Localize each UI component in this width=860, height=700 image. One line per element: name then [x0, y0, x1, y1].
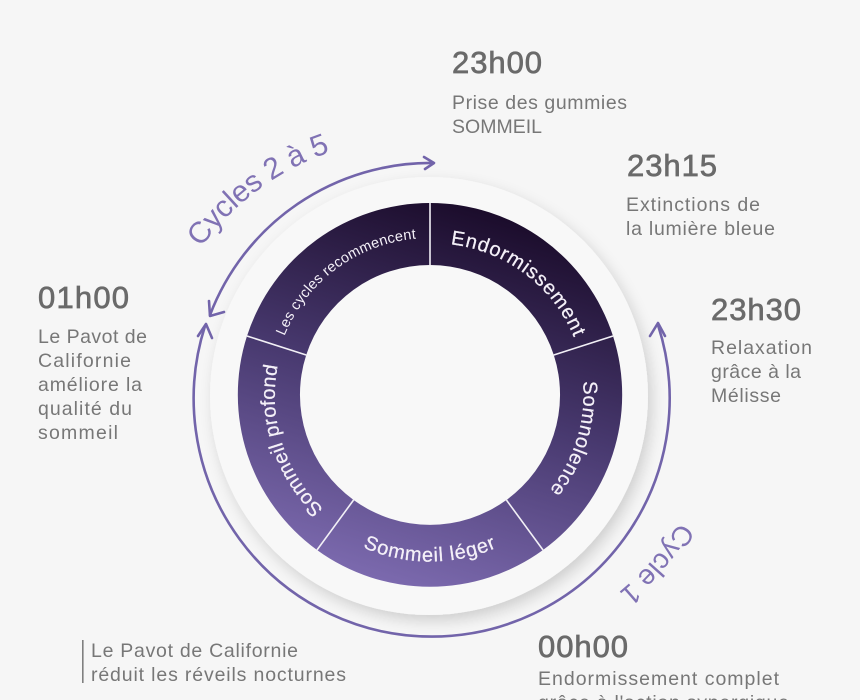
- step: 23h00: [452, 45, 627, 138]
- step: 23h00: 23h00: [452, 45, 542, 80]
- step: 23h15: [626, 148, 775, 240]
- white disc: [210, 177, 648, 615]
- callout: réveils nocturnes: réduit les réveils nocturnes: [91, 664, 346, 686]
- step: 23h15: la lumière bleue: [626, 218, 775, 240]
- step: 01h00: 01h00: [38, 280, 129, 315]
- arrow: cycle 1: [194, 323, 670, 637]
- step: 01h00: améliore la: [38, 374, 142, 396]
- label: Sommeil profond: Sommeil profond: [260, 364, 322, 516]
- sleep cycle ring: [238, 203, 622, 587]
- step: 01h00: Le Pavot de: [38, 326, 147, 348]
- ring segment: Endormissement: [430, 203, 613, 355]
- callout: réveils nocturnes: Le Pavot de Californie: [91, 640, 298, 662]
- arrow: cycles 2 à 5: [209, 157, 434, 316]
- step: 01h00: [38, 280, 147, 444]
- ring segment: Sommeil profond: [238, 336, 354, 550]
- ring segment: Somnolence: [506, 336, 622, 550]
- step: 00h00: 00h00: [538, 629, 628, 664]
- label: Endormissement: Endormissement: [452, 230, 586, 338]
- label: Somnolence: Somnolence: [552, 382, 598, 494]
- step: 23h30: Mélisse: [711, 385, 781, 407]
- label: Les cycles recommencent: Les cycles recommencent: [276, 229, 416, 335]
- segment dividers: [247, 203, 613, 550]
- label: Cycle 1: Cycle 1: [620, 526, 692, 603]
- step: 23h15: Extinctions de: [626, 194, 760, 216]
- ring segment: Sommeil léger: [317, 500, 543, 587]
- step: 01h00: Californie: [38, 350, 131, 372]
- step: 01h00: sommeil: [38, 422, 118, 444]
- label: Cycles 2 à 5: Cycles 2 à 5: [189, 134, 328, 243]
- step: 23h00: Prise des gummies: [452, 92, 627, 114]
- step: 23h00: SOMMEIL: [452, 116, 542, 138]
- step: 00h00: [538, 629, 789, 700]
- step: 01h00: qualité du: [38, 398, 132, 420]
- step: 23h30: grâce à la: [711, 361, 801, 383]
- step: 00h00: Endormissement complet: [538, 668, 780, 690]
- step: 23h30: Relaxation: [711, 337, 812, 359]
- step: 23h30: 23h30: [711, 292, 801, 327]
- step: 23h30: [711, 292, 812, 407]
- ring segment: Les cycles recommencent: [247, 203, 430, 355]
- step: 23h15: 23h15: [627, 148, 717, 183]
- label: Sommeil léger: Sommeil léger: [364, 536, 494, 562]
- callout: réveils nocturnes: [82, 640, 346, 686]
